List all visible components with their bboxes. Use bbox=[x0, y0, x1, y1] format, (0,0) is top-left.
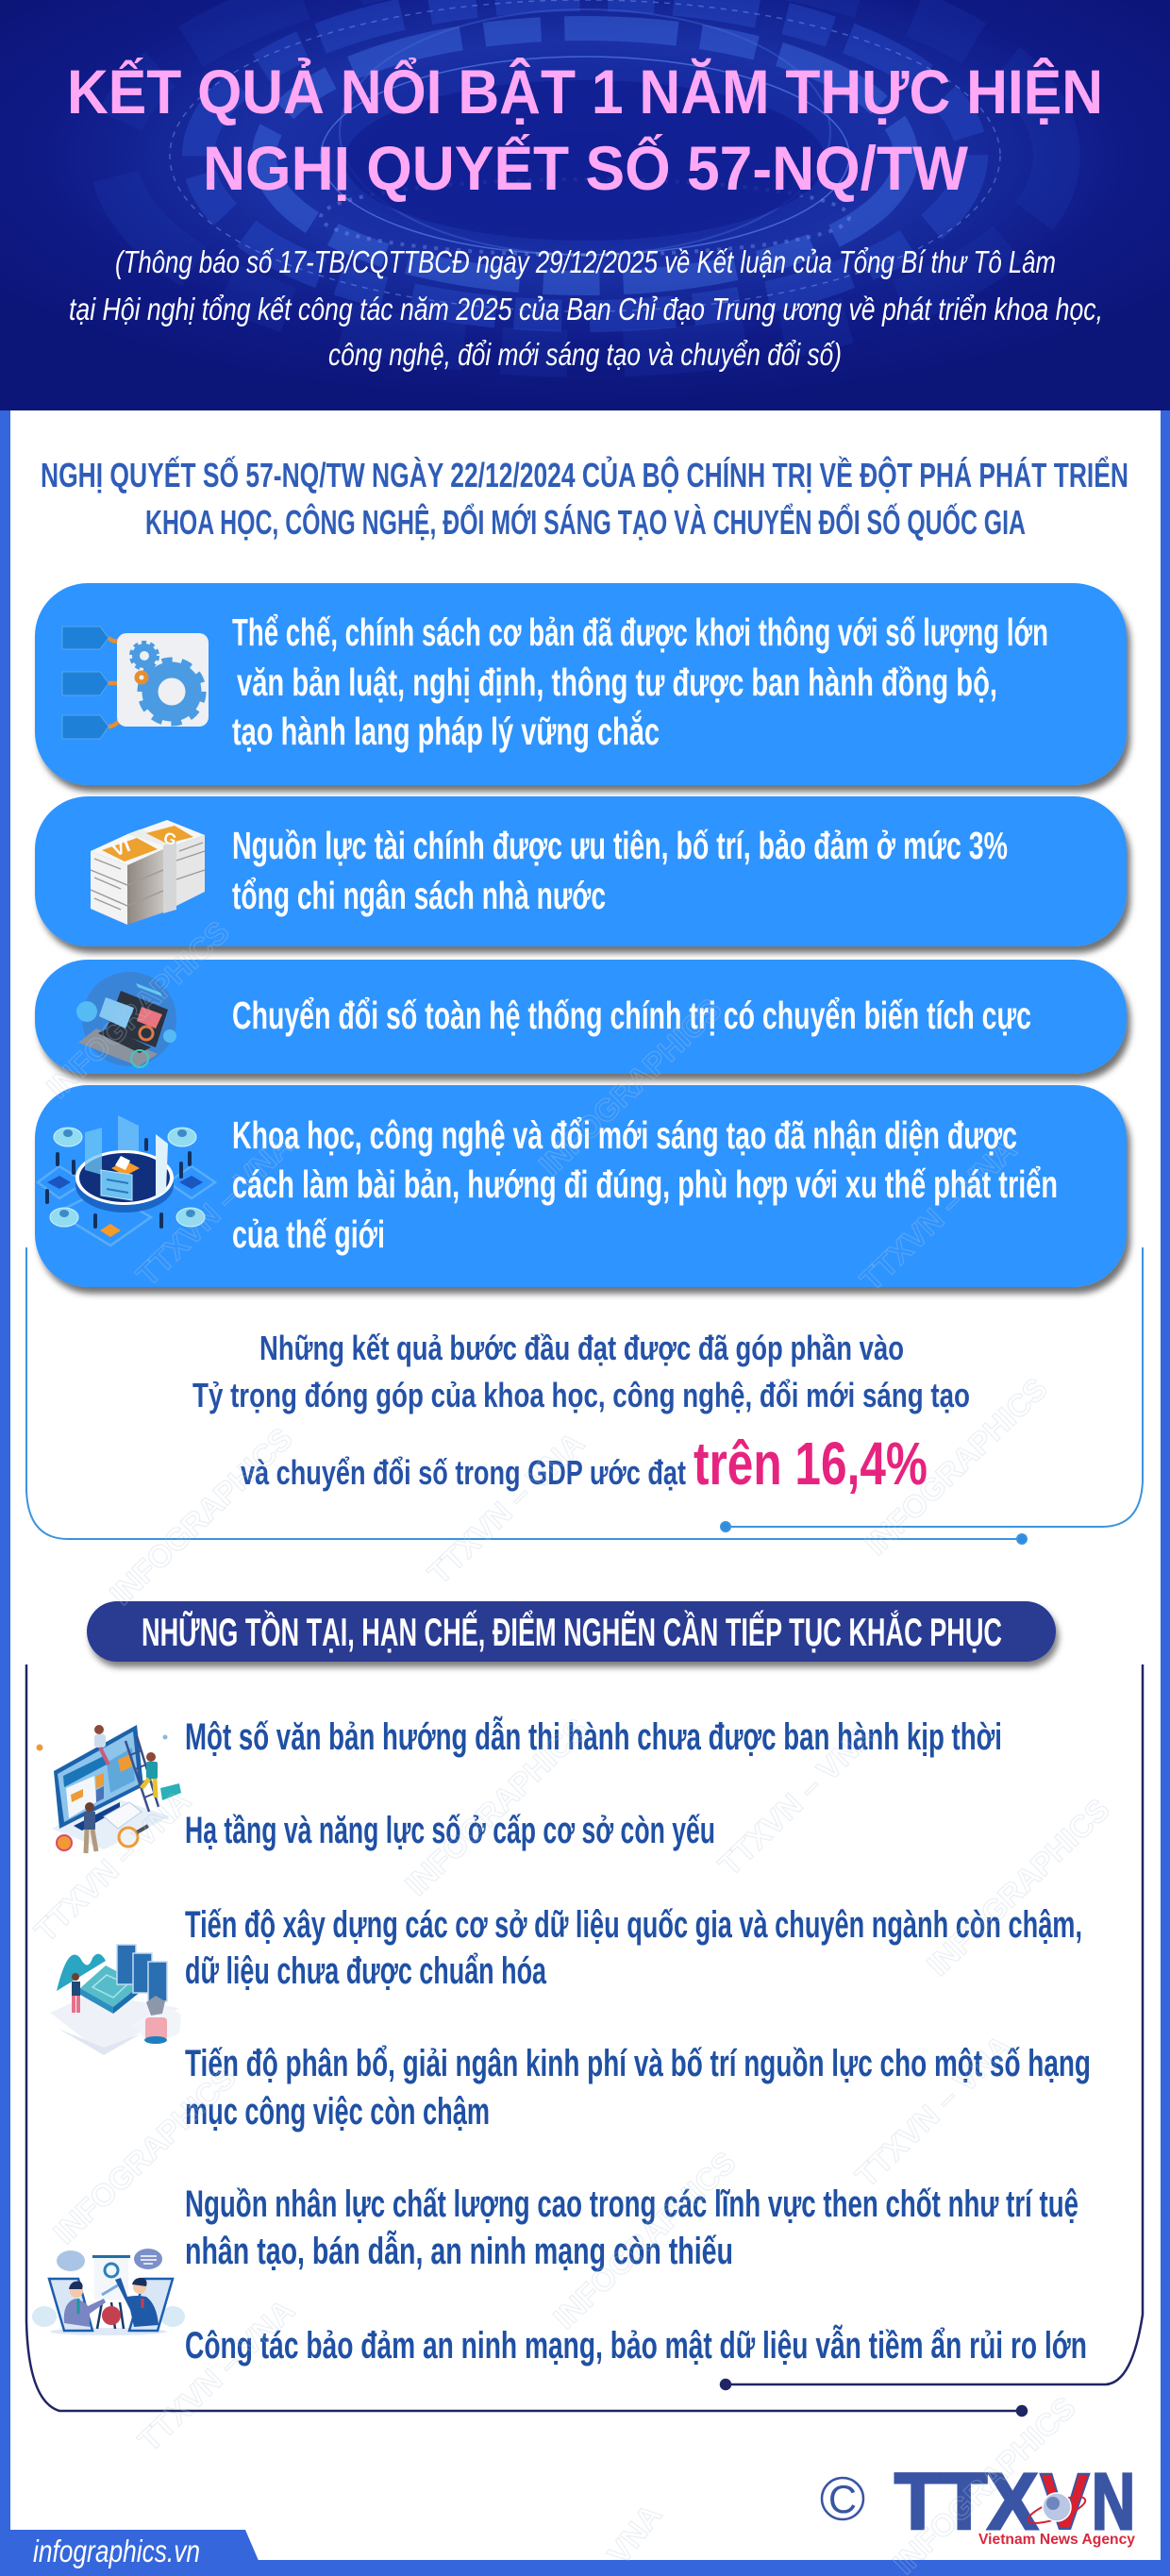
item 4 bbox=[185, 2043, 1091, 2133]
card text: tạo hành lang pháp lý vững chắc bbox=[232, 710, 660, 753]
card: institutions bbox=[35, 583, 1127, 785]
title bbox=[67, 57, 1103, 203]
icon: money stack: G bbox=[161, 828, 179, 849]
card: finance bbox=[35, 796, 1127, 946]
item 5 bbox=[185, 2183, 1078, 2272]
card text bbox=[232, 824, 1008, 917]
results statement: Những kết quả bước đầu đạt được đã góp phần vào bbox=[259, 1329, 904, 1367]
watermark: INFOGRAPHICS bbox=[858, 1371, 1054, 1562]
icon: data center chip bbox=[50, 1945, 181, 2055]
watermark bbox=[27, 914, 1116, 2576]
watermark: TTXVN – VNA bbox=[853, 1131, 1023, 1297]
logo: TTXVN: Vietnam News Agency bbox=[978, 2532, 1135, 2548]
results outline frame bbox=[26, 1247, 1143, 1544]
footer tab: infographics.vn bbox=[33, 2534, 200, 2568]
watermark: INFOGRAPHICS bbox=[546, 2145, 743, 2335]
icon: money stack bbox=[91, 820, 205, 925]
header banner bbox=[0, 0, 1170, 410]
icon: money stack: VI bbox=[109, 835, 133, 861]
icon: isometric tech platform bbox=[38, 1115, 215, 1246]
key figure: trên 16,4% bbox=[694, 1430, 928, 1497]
item 3 bbox=[185, 1904, 1082, 1992]
limitations outline frame bbox=[26, 1664, 1143, 2416]
footer tab bbox=[0, 2530, 265, 2576]
watermark: TTXVN – VNA bbox=[27, 1782, 197, 1949]
watermark: INFOGRAPHICS bbox=[886, 2390, 1082, 2576]
subtitle bbox=[69, 244, 1103, 372]
card text: của thế giới bbox=[232, 1213, 385, 1256]
watermark: TTXVN – VNA bbox=[131, 2292, 301, 2458]
limitations banner bbox=[87, 1601, 1056, 1662]
watermark: INFOGRAPHICS bbox=[398, 1712, 594, 1902]
logo: TTXVN: N bbox=[1092, 2457, 1135, 2546]
results statement bbox=[192, 1329, 970, 1497]
icon: monitor with people bbox=[36, 1725, 181, 1853]
subtitle: công nghệ, đổi mới sáng tạo và chuyển đổi số) bbox=[328, 337, 842, 372]
watermark: TTXVN – VNA bbox=[848, 2028, 1018, 2194]
card text: tổng chi ngân sách nhà nước bbox=[232, 874, 606, 917]
icon: gears and document tags bbox=[62, 627, 209, 739]
watermark: INFOGRAPHICS bbox=[40, 914, 236, 1105]
card: science and technology bbox=[35, 1085, 1127, 1287]
card: digital transformation bbox=[35, 960, 1127, 1074]
logo: TTXVN: TTX bbox=[894, 2457, 1038, 2546]
section heading bbox=[41, 455, 1128, 542]
results statement: và chuyển đổi số trong GDP ước đạt bbox=[241, 1453, 686, 1492]
item 3: dữ liệu chưa được chuẩn hóa bbox=[185, 1950, 547, 1992]
watermark: TTXVN – VNA bbox=[421, 1425, 591, 1591]
icon: laptop bbox=[76, 972, 176, 1067]
watermark: INFOGRAPHICS bbox=[532, 992, 728, 1182]
item 4: mục công việc còn chậm bbox=[185, 2091, 490, 2133]
watermark: TTXVN – VNA bbox=[129, 1127, 299, 1293]
limitations list bbox=[185, 1715, 1091, 2367]
copyright mark: C bbox=[828, 2477, 857, 2521]
watermark: INFOGRAPHICS bbox=[46, 2060, 242, 2250]
title: KẾT QUẢ NỔI BẬT 1 NĂM THỰC HIỆN bbox=[67, 57, 1103, 126]
watermark: INFOGRAPHICS bbox=[920, 1792, 1116, 1982]
logo: TTXVN: V bbox=[1040, 2457, 1090, 2546]
watermark: TTXVN – VNA bbox=[711, 1716, 881, 1882]
item 2: Hạ tầng và năng lực số ở cấp cơ sở còn yếu bbox=[185, 1810, 715, 1851]
watermark: INFOGRAPHICS bbox=[103, 1421, 299, 1612]
copyright mark bbox=[822, 2477, 863, 2521]
logo: TTXVN bbox=[894, 2457, 1135, 2548]
title: NGHỊ QUYẾT SỐ 57-NQ/TW bbox=[203, 133, 969, 203]
card text bbox=[232, 1113, 1058, 1256]
icon: video conference bbox=[32, 2249, 185, 2335]
item 5: nhân tạo, bán dẫn, an ninh mạng còn thiếu bbox=[185, 2229, 733, 2272]
card text bbox=[232, 611, 1048, 753]
watermark: VNA bbox=[600, 2498, 668, 2570]
